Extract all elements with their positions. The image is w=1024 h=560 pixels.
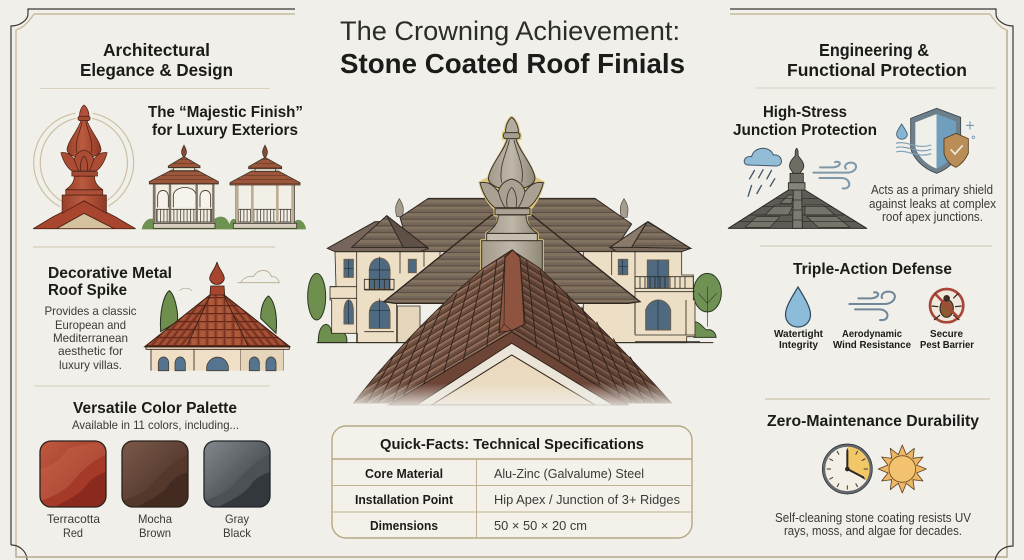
row: installation point (355, 493, 680, 507)
item: aerodynamic wind resistance: Aerodynamic (842, 328, 902, 340)
row: core material: Alu-Zinc (Galvalume) Steel (494, 467, 644, 481)
swatch: terracotta red: Red (63, 526, 83, 540)
heading: majestic finish: for Luxury Exteriors (152, 122, 298, 139)
heading: majestic finish (148, 104, 303, 139)
icon: clock (822, 444, 872, 494)
item: watertight integrity: Integrity (779, 339, 818, 351)
panel: architectural elegance and design (33, 40, 306, 540)
text: shield description (869, 183, 997, 224)
row: core material (365, 467, 644, 481)
heading: versatile color palette (72, 400, 239, 432)
item: secure pest barrier: Secure (930, 328, 963, 340)
icon: mediterranean villa (145, 262, 290, 371)
back roof (400, 198, 632, 252)
heading: engineering and protection: Functional Protection (787, 60, 967, 80)
text: roof spike description: Mediterranean (53, 331, 128, 345)
heading: zero maintenance durability: Zero-Maintenance Durability (767, 413, 979, 430)
central illustration: villa and stone coated finial (308, 117, 721, 410)
title: The Crowning Achievement: (340, 16, 680, 46)
finial (480, 117, 543, 273)
heading: versatile color palette: Available in 11 colors, including... (72, 418, 239, 432)
bottom fade (347, 383, 680, 410)
swatch: gray black: Black (223, 526, 252, 540)
icon: open gazebo (228, 145, 306, 229)
item: watertight integrity: Watertight (774, 328, 823, 340)
swatch: mocha brown: Brown (139, 526, 171, 540)
item: aerodynamic wind resistance: Wind Resistance (833, 339, 911, 351)
item: watertight integrity (774, 287, 823, 351)
icon: sun (878, 445, 926, 493)
text: durability description: Self-cleaning stone coating resists UV (775, 511, 972, 525)
row: installation point: Installation Point (355, 493, 454, 507)
text: shield description: Acts as a primary shield (871, 183, 993, 197)
heading: architectural elegance: Architectural (103, 40, 210, 60)
panel: engineering and functional protection (728, 40, 997, 538)
row: dimensions: Dimensions (370, 519, 438, 533)
swatch: gray black (204, 441, 270, 540)
foreground roof (353, 250, 672, 405)
trees and shrubs (308, 273, 721, 343)
text: shield description: roof apex junctions. (882, 210, 983, 224)
icon: ornate gazebo (142, 145, 230, 229)
text: shield description: against leaks at complex (869, 197, 997, 211)
swatch: terracotta red: Terracotta (47, 512, 100, 526)
table: quick facts technical specifications (332, 426, 692, 538)
text: roof spike description: Provides a classic (44, 304, 136, 318)
row: core material: Core Material (365, 467, 443, 481)
swatch: gray black: Gray (225, 512, 249, 526)
item: secure pest barrier: Pest Barrier (920, 339, 974, 351)
title (340, 16, 685, 79)
swatch: terracotta red (40, 441, 106, 540)
chimneys (396, 199, 628, 217)
windows (344, 257, 671, 330)
walls (330, 252, 695, 343)
item: aerodynamic wind resistance (833, 292, 911, 351)
text: roof spike description: aesthetic for (58, 344, 123, 358)
heading: high stress junction protection (733, 104, 877, 139)
icon: shield with water droplet (896, 108, 975, 173)
heading: majestic finish: The “Majestic Finish” (148, 104, 303, 121)
swatch: mocha brown (122, 441, 188, 540)
heading: architectural elegance (80, 40, 233, 80)
heading: engineering and protection: Engineering & (819, 40, 929, 60)
icon: terracotta finial with halo (33, 105, 135, 229)
heading: versatile color palette: Versatile Color Palette (73, 400, 237, 417)
heading: architectural elegance: Elegance & Design (80, 60, 233, 80)
heading: high stress junction protection: High-Stress (763, 104, 847, 121)
heading: decorative metal roof spike (48, 265, 172, 299)
item: secure pest barrier (920, 289, 974, 351)
table header: Quick-Facts: Technical Specifications (380, 436, 644, 453)
icon: storm and grey roof finial (728, 148, 867, 228)
heading: triple action defense: Triple-Action Defense (793, 261, 952, 278)
row: installation point: Hip Apex / Junction of 3+ Ridges (494, 493, 680, 507)
title: Stone Coated Roof Finials (340, 48, 685, 79)
row: dimensions (370, 519, 587, 533)
middle roof (384, 215, 640, 303)
heading: engineering and protection (787, 40, 967, 80)
ground line (317, 341, 713, 344)
heading: high stress junction protection: Junction Protection (733, 122, 877, 139)
balconies (330, 277, 700, 342)
text: roof spike description (44, 304, 136, 372)
text: roof spike description: luxury villas. (59, 358, 122, 372)
heading: decorative metal roof spike: Roof Spike (48, 282, 127, 299)
row: dimensions: 50 × 50 × 20 cm (494, 519, 587, 533)
text: durability description: rays, moss, and algae for decades. (784, 524, 962, 538)
text: durability description (775, 511, 972, 538)
swatch: mocha brown: Mocha (138, 512, 172, 526)
text: roof spike description: European and (55, 318, 126, 332)
heading: decorative metal roof spike: Decorative Metal (48, 265, 172, 282)
side gables (327, 216, 691, 252)
